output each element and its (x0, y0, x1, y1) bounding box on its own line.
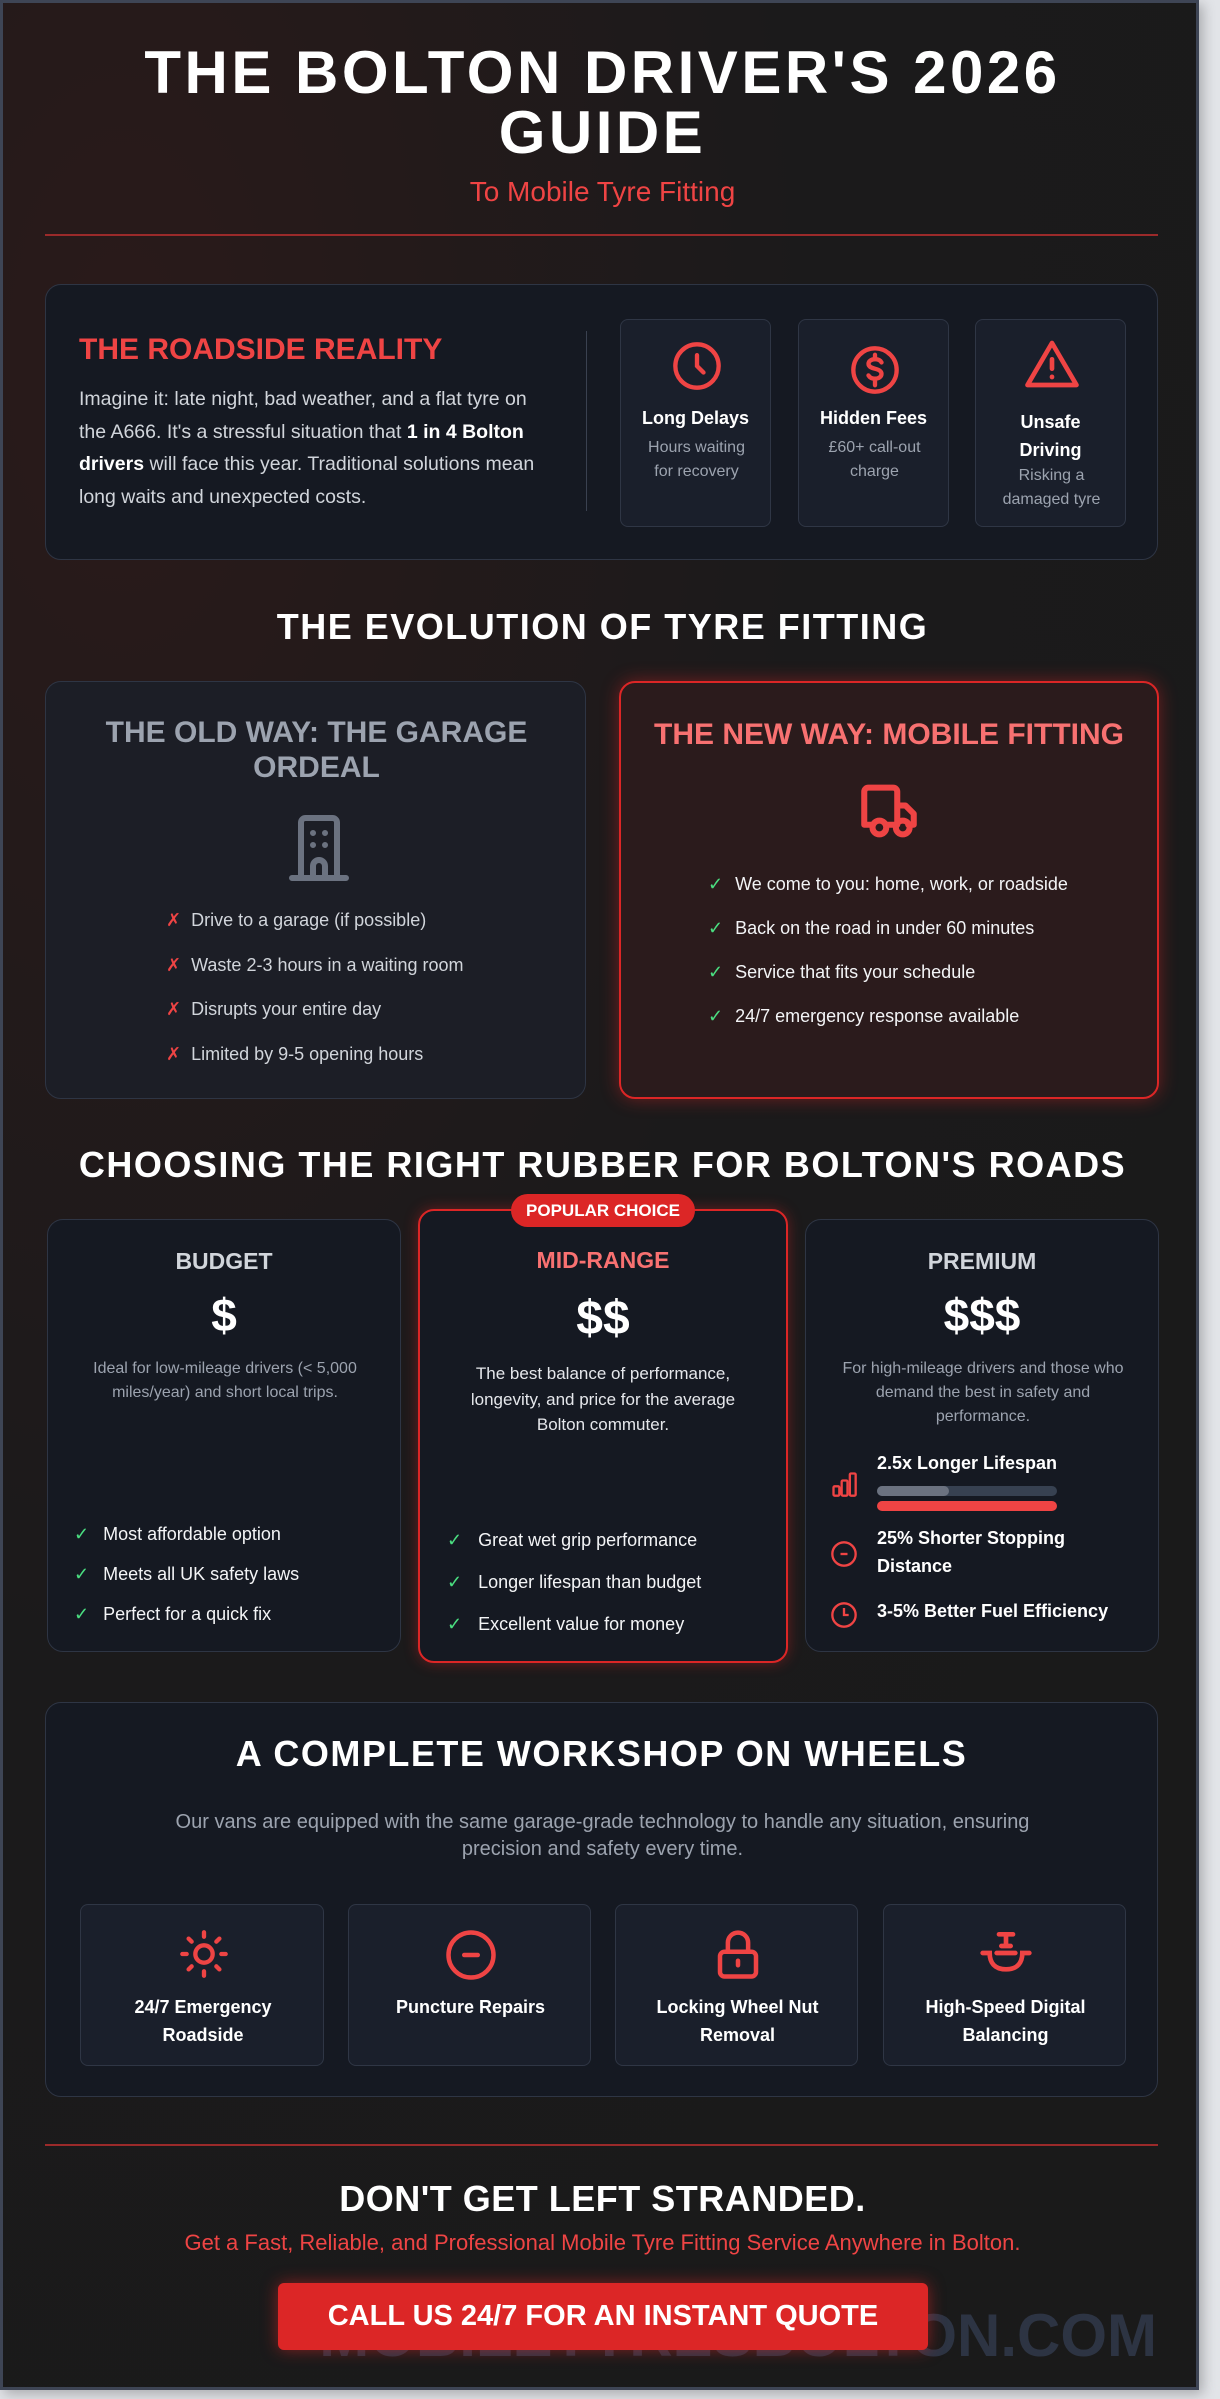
icon: truck (861, 784, 917, 838)
panel: new way (619, 681, 1159, 1099)
button: call us: CALL US 24/7 FOR AN INSTANT QUOTE (328, 2300, 878, 2332)
panel: old way (45, 681, 586, 1099)
stat: fuel efficiency (831, 1601, 1108, 1628)
panel: mid-range tier (418, 1209, 788, 1663)
card: balancing: High-Speed Digital Balancing (925, 1997, 1086, 2045)
heading: evolution: THE EVOLUTION OF TYRE FITTING (277, 606, 928, 647)
stat: lifespan: 2.5x Longer Lifespan (877, 1453, 1057, 1473)
panel: budget tier: Ideal for low-mileage drivers (< 5,000 miles/year) and short local trips. (93, 1360, 357, 1401)
list: old way drawbacks: ✗ Limited by 9-5 opening hours (166, 1044, 423, 1064)
card: long delays: Hours waiting for recovery (648, 439, 745, 480)
icon: money (851, 346, 899, 394)
stat: stopping distance: 25% Shorter Stopping Distance (877, 1528, 1065, 1576)
text block: intro: Imagine it: late night, bad weather, and a flat tyre on the A666. It's a stressful situation that 1 in 4 Bolton drivers will face this year. Traditional solutions mean long waits and unexpected costs. (79, 388, 534, 508)
list: budget features (74, 1524, 299, 1624)
panel: premium tier (805, 1219, 1159, 1652)
text block: workshop intro: Our vans are equipped with the same garage-grade technology to handle any situation, ensuring precision and safety every time. (176, 1811, 1029, 1860)
panel: mid-range tier: The best balance of performance, longevity, and price for the average Bolton commuter. (471, 1364, 735, 1434)
list: old way drawbacks: ✗ Disrupts your entire day (166, 999, 381, 1019)
panel: mid-range tier: $$ (576, 1292, 630, 1345)
panel: budget tier: $ (211, 1289, 237, 1341)
panel: premium tier: PREMIUM (928, 1248, 1036, 1274)
card: locking wheel nut (615, 1904, 858, 2066)
heading: new way: THE NEW WAY: MOBILE FITTING (654, 718, 1124, 751)
list: mid-range features (447, 1530, 702, 1634)
list: new way benefits (708, 874, 1068, 1026)
card: balancing (883, 1904, 1126, 2066)
heading: roadside reality: THE ROADSIDE REALITY (79, 333, 442, 366)
icon: warning (1025, 340, 1079, 388)
list: new way benefits: ✓ Service that fits your schedule (708, 962, 975, 982)
list: budget features: ✓ Meets all UK safety laws (74, 1564, 299, 1584)
card: hidden fees: £60+ call-out charge (828, 439, 921, 480)
list: old way drawbacks (166, 910, 464, 1064)
heading: workshop: A COMPLETE WORKSHOP ON WHEELS (236, 1733, 967, 1774)
panel: workshop on wheels (45, 1702, 1158, 2097)
card: emergency (80, 1904, 324, 2066)
title (144, 39, 1061, 166)
list: mid-range features: ✓ Excellent value for money (447, 1614, 684, 1634)
card: hidden fees: Hidden Fees (820, 408, 927, 428)
list: budget features: ✓ Most affordable option (74, 1524, 281, 1544)
list: new way benefits: ✓ 24/7 emergency response available (708, 1006, 1019, 1026)
badge: popular choice (511, 1194, 695, 1227)
card: long delays: Long Delays (642, 408, 749, 428)
list: budget features: ✓ Perfect for a quick fix (74, 1604, 271, 1624)
card: unsafe driving: Driving (1019, 440, 1082, 460)
title: GUIDE (499, 99, 706, 166)
heading: choosing rubber: CHOOSING THE RIGHT RUBBER FOR BOLTON'S ROADS (79, 1144, 1126, 1185)
icon: building (289, 815, 349, 881)
panel: budget tier (47, 1219, 401, 1652)
watermark: MOBILETYRESBOLTON.COM (319, 2302, 1157, 2369)
heading: old way: THE OLD WAY: THE GARAGE ORDEAL (106, 716, 527, 784)
card: puncture repairs (348, 1904, 591, 2066)
icon: clock (673, 342, 721, 390)
title: THE BOLTON DRIVER'S 2026 (144, 39, 1061, 106)
stat: fuel efficiency: 3-5% Better Fuel Efficiency (877, 1601, 1108, 1621)
list: mid-range features: ✓ Great wet grip performance (447, 1530, 697, 1550)
badge: popular choice: POPULAR CHOICE (526, 1201, 680, 1220)
panel: mid-range tier: MID-RANGE (537, 1247, 669, 1273)
card: locking wheel nut: Locking Wheel Nut Removal (656, 1997, 818, 2045)
card: unsafe driving: Risking a damaged tyre (1003, 467, 1100, 508)
list: new way benefits: ✓ We come to you: home, work, or roadside (708, 874, 1068, 894)
button: call us (278, 2283, 928, 2350)
subtitle: To Mobile Tyre Fitting (470, 176, 735, 207)
card: hidden fees (798, 319, 949, 527)
panel: roadside reality (45, 284, 1158, 560)
card: long delays (620, 319, 771, 527)
card: emergency: 24/7 Emergency Roadside (134, 1997, 272, 2045)
list: mid-range features: ✓ Longer lifespan than budget (447, 1572, 701, 1592)
stat: lifespan (832, 1453, 1057, 1511)
list: old way drawbacks: ✗ Drive to a garage (if possible) (166, 910, 426, 930)
panel: premium tier: $$$ (944, 1289, 1020, 1341)
text block: cta subtitle: Get a Fast, Reliable, and Professional Mobile Tyre Fitting Service Anywhere in Bolton. (184, 2230, 1020, 2255)
card: unsafe driving: Unsafe (1020, 412, 1081, 432)
heading: don't get left stranded: DON'T GET LEFT STRANDED. (339, 2178, 866, 2219)
card: puncture repairs: Puncture Repairs (396, 1997, 545, 2017)
panel: premium tier: For high-mileage drivers and those who demand the best in safety and performance. (842, 1360, 1124, 1425)
card: unsafe driving (975, 319, 1126, 527)
panel: budget tier: BUDGET (175, 1248, 273, 1274)
list: old way drawbacks: ✗ Waste 2-3 hours in a waiting room (166, 954, 464, 974)
list: new way benefits: ✓ Back on the road in under 60 minutes (708, 918, 1034, 938)
